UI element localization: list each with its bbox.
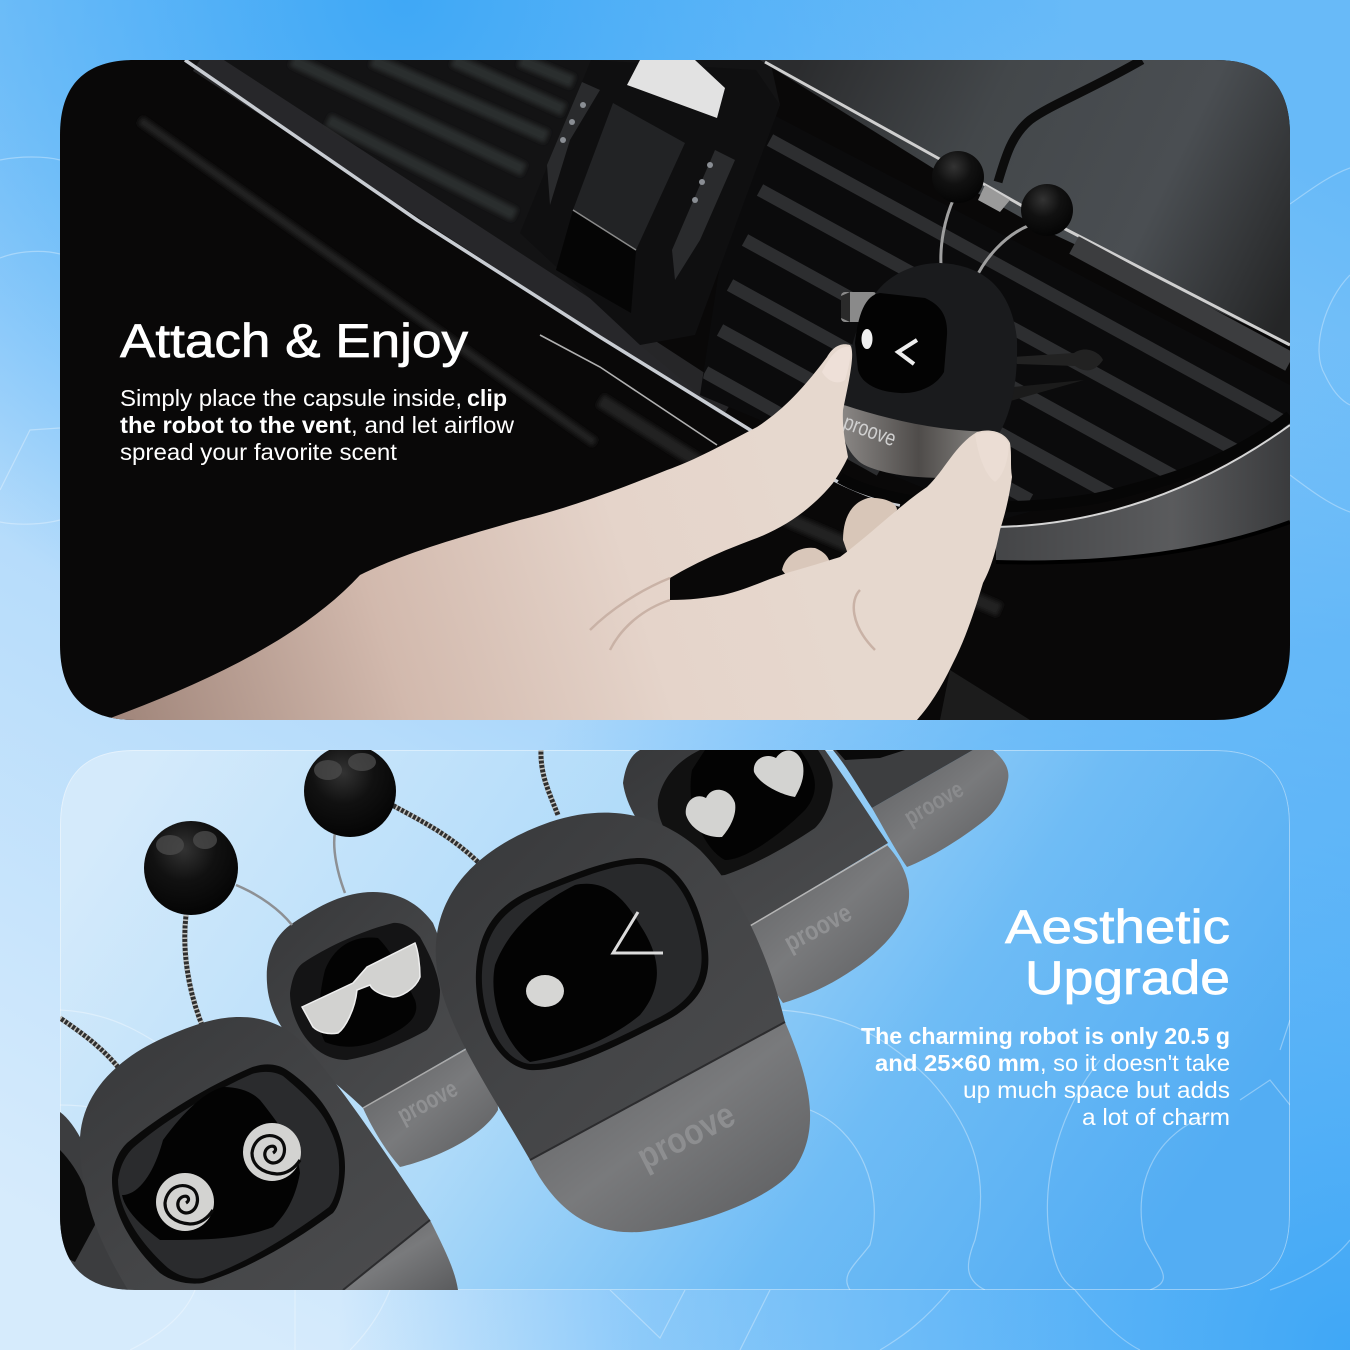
panel: attach and enjoy (60, 60, 1290, 720)
body (844, 263, 1017, 432)
far robot (833, 750, 1008, 867)
description: , so it doesn't take (1040, 1050, 1230, 1076)
face screen (476, 858, 708, 1070)
heading: attach and enjoy: Attach & Enjoy (120, 314, 469, 367)
description: a lot of charm (1082, 1104, 1230, 1130)
brand: proove (840, 409, 900, 451)
description: up much space but adds (963, 1077, 1230, 1103)
description: The charming robot is only 20.5 g (861, 1023, 1230, 1049)
eye dot (526, 975, 564, 1007)
hearts robot (623, 750, 909, 1003)
face screen (855, 293, 947, 393)
brand: proove (779, 897, 856, 957)
description: Simply place the capsule inside, (120, 385, 462, 411)
hand (105, 344, 1012, 720)
heading: aesthetic upgrade: Aesthetic (1005, 900, 1230, 953)
center control (547, 60, 776, 345)
description (861, 1023, 1230, 1130)
heading: aesthetic upgrade: Upgrade (1025, 951, 1230, 1004)
nails (975, 432, 1009, 482)
face screen (290, 923, 440, 1060)
dashboard (760, 60, 1290, 362)
curved trim (840, 416, 1290, 720)
description: and 25×60 mm (875, 1050, 1040, 1076)
robot air freshener (840, 151, 1103, 478)
brand: proove (630, 1093, 741, 1177)
creases (590, 578, 875, 650)
capsule (842, 405, 979, 478)
panel: aesthetic upgrade (60, 745, 1290, 1290)
antennas (60, 745, 558, 1072)
eye chevron (613, 912, 663, 953)
face screen (658, 750, 833, 876)
description (120, 385, 514, 465)
spiral eye robot (60, 1017, 458, 1290)
curled fingers (843, 498, 897, 552)
face screen (112, 1064, 345, 1284)
panel outline (60, 750, 1290, 1290)
right vent slats (700, 134, 1290, 501)
antennas and clip (841, 151, 1103, 402)
brand: proove (393, 1074, 462, 1129)
description: clip (467, 385, 507, 411)
spiral eyes (156, 1123, 301, 1231)
eyes (862, 329, 917, 364)
sunglasses robot (267, 892, 498, 1167)
sunglasses (302, 943, 420, 1034)
palm and fingers (105, 344, 1012, 720)
description: , and let airflow (351, 412, 514, 438)
left vent slats (140, 60, 1000, 610)
decorative lines (60, 1010, 1290, 1290)
center robot (436, 813, 810, 1232)
hearts (686, 751, 803, 837)
heading: aesthetic upgrade (1005, 900, 1230, 1004)
description: spread your favorite scent (120, 439, 398, 465)
far robot: proove (900, 776, 968, 831)
description: the robot to the vent (120, 412, 351, 438)
